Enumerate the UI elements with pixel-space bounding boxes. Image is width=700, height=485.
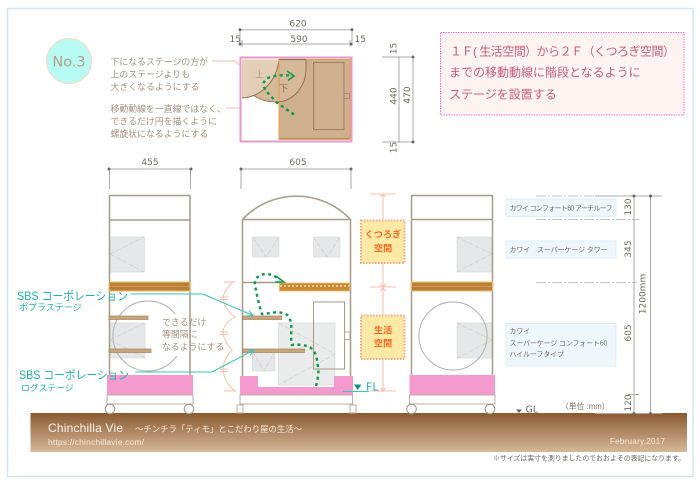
label: log stage <box>19 350 254 393</box>
product label: high roof <box>506 324 616 366</box>
FL marker: FL <box>366 380 379 394</box>
left cage side view <box>105 196 194 414</box>
FL marker <box>343 380 379 394</box>
top plan dimensions: 590 <box>290 35 308 45</box>
note: equal spacing: 等間隔に <box>162 328 198 340</box>
unit: （単位 :mm） <box>561 401 610 411</box>
footnote: ※サイズは実寸を測りましたのでおおよその表記になります。 <box>493 454 685 462</box>
badge: No.3 <box>46 38 92 84</box>
product label: high roof: カワイ <box>510 328 530 336</box>
top plan view <box>240 58 352 142</box>
stage brackets <box>220 282 236 391</box>
top plan dimensions: 620 <box>289 20 307 30</box>
plan side dimensions: 440 <box>390 87 400 105</box>
label: log stage: SBS コーポレーション <box>19 369 129 382</box>
note: equal spacing: できるだけ <box>162 318 206 328</box>
space labels: 空間 <box>374 338 392 348</box>
product label: high roof: スーパーケージ コンフォート60 <box>510 340 608 348</box>
callout: stage purpose: ステージを設置する <box>449 88 557 102</box>
note: equal spacing: なるようにする <box>162 342 224 352</box>
space labels: くつろぎ <box>365 228 401 240</box>
GL marker <box>516 404 539 416</box>
note: lower stage larger <box>110 56 250 92</box>
space labels <box>361 194 404 391</box>
product label: arch roof: カワイ コンフォート60 アーチルーフ <box>510 204 612 212</box>
plan side dimensions: 15 <box>390 43 400 54</box>
plan side dimensions: 470 <box>403 86 413 104</box>
badge: No.3: No.3 <box>52 54 86 70</box>
height dimensions: 120 <box>624 394 634 412</box>
product label: high roof: ハイルーフタイプ <box>510 350 564 358</box>
note: spiral route: できるだけ円を描くように <box>110 116 217 126</box>
label: poplar stage <box>17 290 253 316</box>
label: poplar stage: SBS コーポレーション <box>17 290 128 303</box>
note: spiral route: 螺旋状になるようにする <box>110 128 208 139</box>
product label: arch roof <box>506 199 616 216</box>
ground band: Chinchilla Vie <box>48 421 123 435</box>
height dimensions: 605 <box>624 324 634 342</box>
note: lower stage larger: 大きくなるようにする <box>110 81 199 92</box>
top plan dimensions: 15 <box>230 35 241 45</box>
height dimensions <box>536 194 662 415</box>
right cage side view <box>407 196 495 414</box>
label: poplar stage: ポプラステージ <box>19 302 82 312</box>
label: log stage: ログステージ <box>21 382 74 393</box>
top plan dimensions <box>230 20 366 47</box>
note: lower stage larger: 上のステージよりも <box>110 70 190 80</box>
space labels: 空間 <box>374 242 392 254</box>
GL marker: GL <box>526 404 539 416</box>
ground band: February,2017 <box>610 437 666 446</box>
ground band: https://chinchillavie.com/ <box>48 437 145 447</box>
note: equal spacing <box>162 318 224 352</box>
callout: stage purpose: までの移動動線に階段となるように <box>449 64 641 80</box>
top plan dimensions: 15 <box>354 35 366 45</box>
left cage dimension <box>108 158 192 189</box>
height dimensions: 345 <box>624 240 634 258</box>
product label: tower <box>506 241 616 258</box>
center cage dimension <box>240 158 352 189</box>
height dimensions: 130 <box>624 198 634 216</box>
plan side dimensions <box>382 43 414 153</box>
height dimensions: 1200mm <box>638 274 648 314</box>
left cage dimension: 455 <box>141 158 159 168</box>
product label: tower: カワイ スーパーケージ タワー <box>510 245 608 254</box>
center cage dimension: 605 <box>289 158 307 168</box>
space labels: 生活 <box>374 324 392 336</box>
note: spiral route <box>110 102 269 139</box>
top plan view: 下 <box>279 84 288 94</box>
ground band: ～チンチラ「ティモ」とこだわり屋の生活～ <box>135 424 303 434</box>
plan side dimensions: 15 <box>390 142 400 153</box>
top plan view: 上 <box>255 70 264 80</box>
callout: stage purpose: １Ｆ( 生活空間）から２Ｆ（くつろぎ空間） <box>450 44 675 58</box>
note: lower stage larger: 下になるステージの方が <box>110 56 208 67</box>
callout: stage purpose <box>440 32 684 115</box>
note: spiral route: 移動動線を一直線ではなく、 <box>110 103 226 114</box>
ground band <box>30 413 687 452</box>
center cage side view <box>237 196 356 413</box>
